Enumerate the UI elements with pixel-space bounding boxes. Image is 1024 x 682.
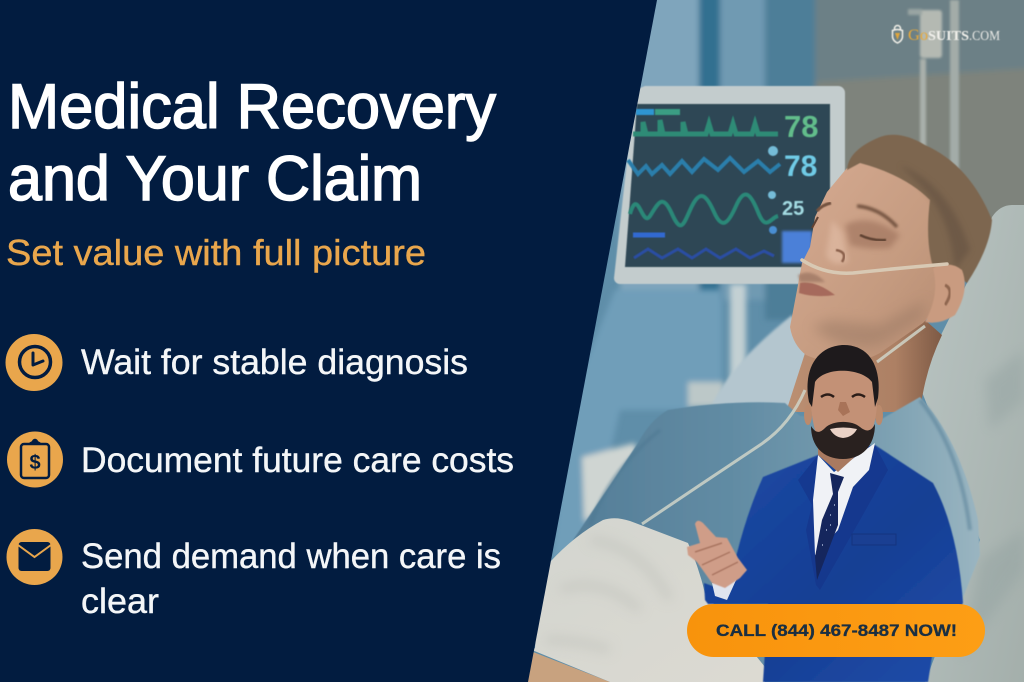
left pillow	[712, 315, 830, 410]
navy diagonal panel	[0, 0, 657, 682]
logo icon: padlock shield	[892, 26, 902, 43]
pointing hand	[687, 521, 747, 588]
shirt cuff	[712, 578, 737, 600]
monitor readings	[768, 109, 818, 263]
tie	[815, 473, 844, 580]
item: wait for stable diagnosis: Wait for stable diagnosis	[81, 343, 468, 382]
lapel shading	[798, 445, 888, 590]
item: wait for stable diagnosis	[6, 334, 468, 391]
patient head	[790, 135, 992, 363]
monitor readings: 25	[782, 198, 804, 220]
item: send demand when care is clear: Send demand when care is	[81, 537, 501, 576]
title line two: and Your Claim	[8, 144, 422, 214]
monitor readings: 78	[784, 109, 818, 144]
patient neck	[786, 320, 942, 412]
logo: Go	[908, 27, 928, 44]
shirt	[813, 443, 875, 555]
icon: clipboard with dollar sign: $	[29, 452, 41, 474]
item: document future care costs	[7, 432, 514, 488]
icon: clipboard with dollar sign	[7, 432, 63, 488]
patient gown	[573, 397, 980, 680]
bed sheet	[532, 518, 765, 682]
item: send demand when care is clear	[6, 529, 501, 621]
bed pillow right	[922, 205, 1024, 682]
ear	[925, 264, 965, 323]
logo: SUITS	[928, 28, 969, 43]
nasal cannula	[802, 260, 947, 273]
logo: .COM	[969, 28, 1000, 43]
patient monitor	[614, 86, 845, 284]
hair	[847, 135, 992, 283]
jacket pocket	[852, 534, 896, 545]
subtitle: Set value with full picture	[6, 232, 426, 273]
icon: clock	[6, 334, 62, 391]
patient skin at bed foot	[528, 650, 610, 682]
logo	[892, 26, 1000, 44]
sheet folds	[545, 540, 670, 650]
call to action button	[687, 604, 985, 657]
monitor readings: 78	[784, 150, 817, 183]
suit	[704, 445, 963, 682]
call to action button: CALL (844) 467-8487 NOW!	[716, 622, 957, 640]
hospital photo background	[520, 0, 1024, 682]
gown folds	[590, 400, 970, 530]
pillow shading	[960, 350, 1024, 660]
face	[790, 158, 945, 363]
item: document future care costs: Document future care costs	[81, 441, 514, 480]
icon: envelope	[6, 529, 62, 585]
item: send demand when care is clear: clear	[81, 582, 159, 621]
title: Medical Recovery	[8, 72, 496, 142]
oxygen tube	[642, 326, 925, 524]
head and neck	[804, 345, 883, 472]
attorney	[687, 345, 963, 682]
